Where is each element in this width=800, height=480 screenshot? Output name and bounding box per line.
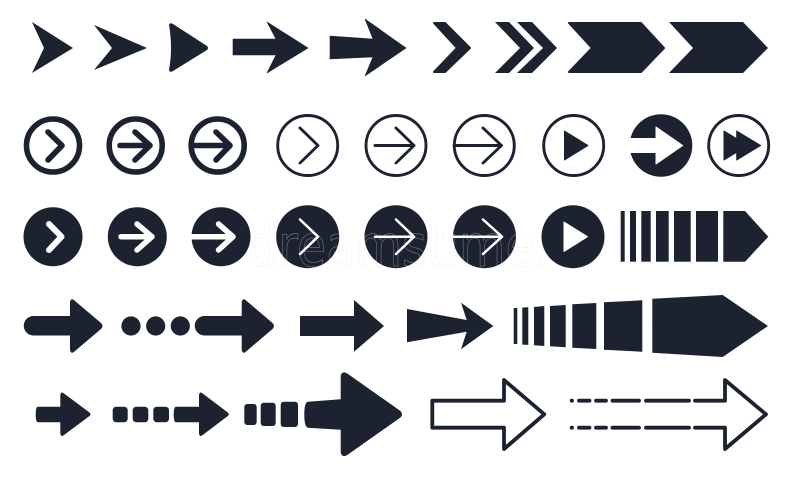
icon: ring with fast forward: [709, 116, 769, 176]
icon: notched arrowhead: [32, 22, 73, 73]
icon: solid disc with arrow: [108, 207, 167, 266]
icon: square block arrow: [300, 300, 384, 352]
icon: small rounded arrow: [36, 393, 90, 436]
icon: solid disc with play triangle: [542, 205, 604, 268]
watermark: dreamstime.: [248, 212, 550, 280]
icon: solid disc with thin arrow: [364, 205, 428, 268]
icon: slim notched arrowhead: [94, 25, 147, 70]
icon: thin ring with through arrow: [454, 116, 514, 176]
icon: solid disc with thin through arrow: [453, 205, 516, 268]
icon: solid disc with white block arrow: [628, 114, 692, 177]
icon: ring with play triangle: [544, 116, 604, 176]
icon: widening segmented arrow: [514, 295, 768, 357]
icon: curved triangle: [169, 23, 208, 72]
icon: thin ring with arrow: [366, 116, 426, 176]
icon: striped block arrow: [621, 211, 768, 262]
icon: large segmented arrow: [244, 372, 402, 456]
icon: solid disc with through arrow: [192, 207, 250, 266]
icon: dashed outlined arrow: [572, 380, 766, 449]
icon: dotted rounded arrow: [121, 299, 274, 353]
icon: rounded arrow: [24, 299, 102, 353]
icon: straight arrow: [233, 22, 308, 73]
icon: ring with arrow: [109, 119, 162, 172]
icon: outlined block arrow: [432, 380, 544, 449]
icon: segmented small arrow: [113, 393, 229, 436]
icon: tapered arrow: [330, 19, 406, 76]
icon: barbed tapered arrow: [407, 303, 493, 349]
icon: solid disc with thin chevron: [276, 205, 339, 268]
icon: ring with chevron: [26, 119, 80, 172]
icon: ring with through arrow: [191, 119, 244, 172]
icon: double chevron: [495, 22, 557, 73]
icon: wide chevron block two: [669, 22, 768, 73]
icon: solid disc with chevron: [24, 207, 82, 266]
icon: chevron: [434, 23, 470, 72]
icon: wide chevron block: [569, 23, 664, 72]
icon: thin ring with chevron: [278, 116, 338, 176]
